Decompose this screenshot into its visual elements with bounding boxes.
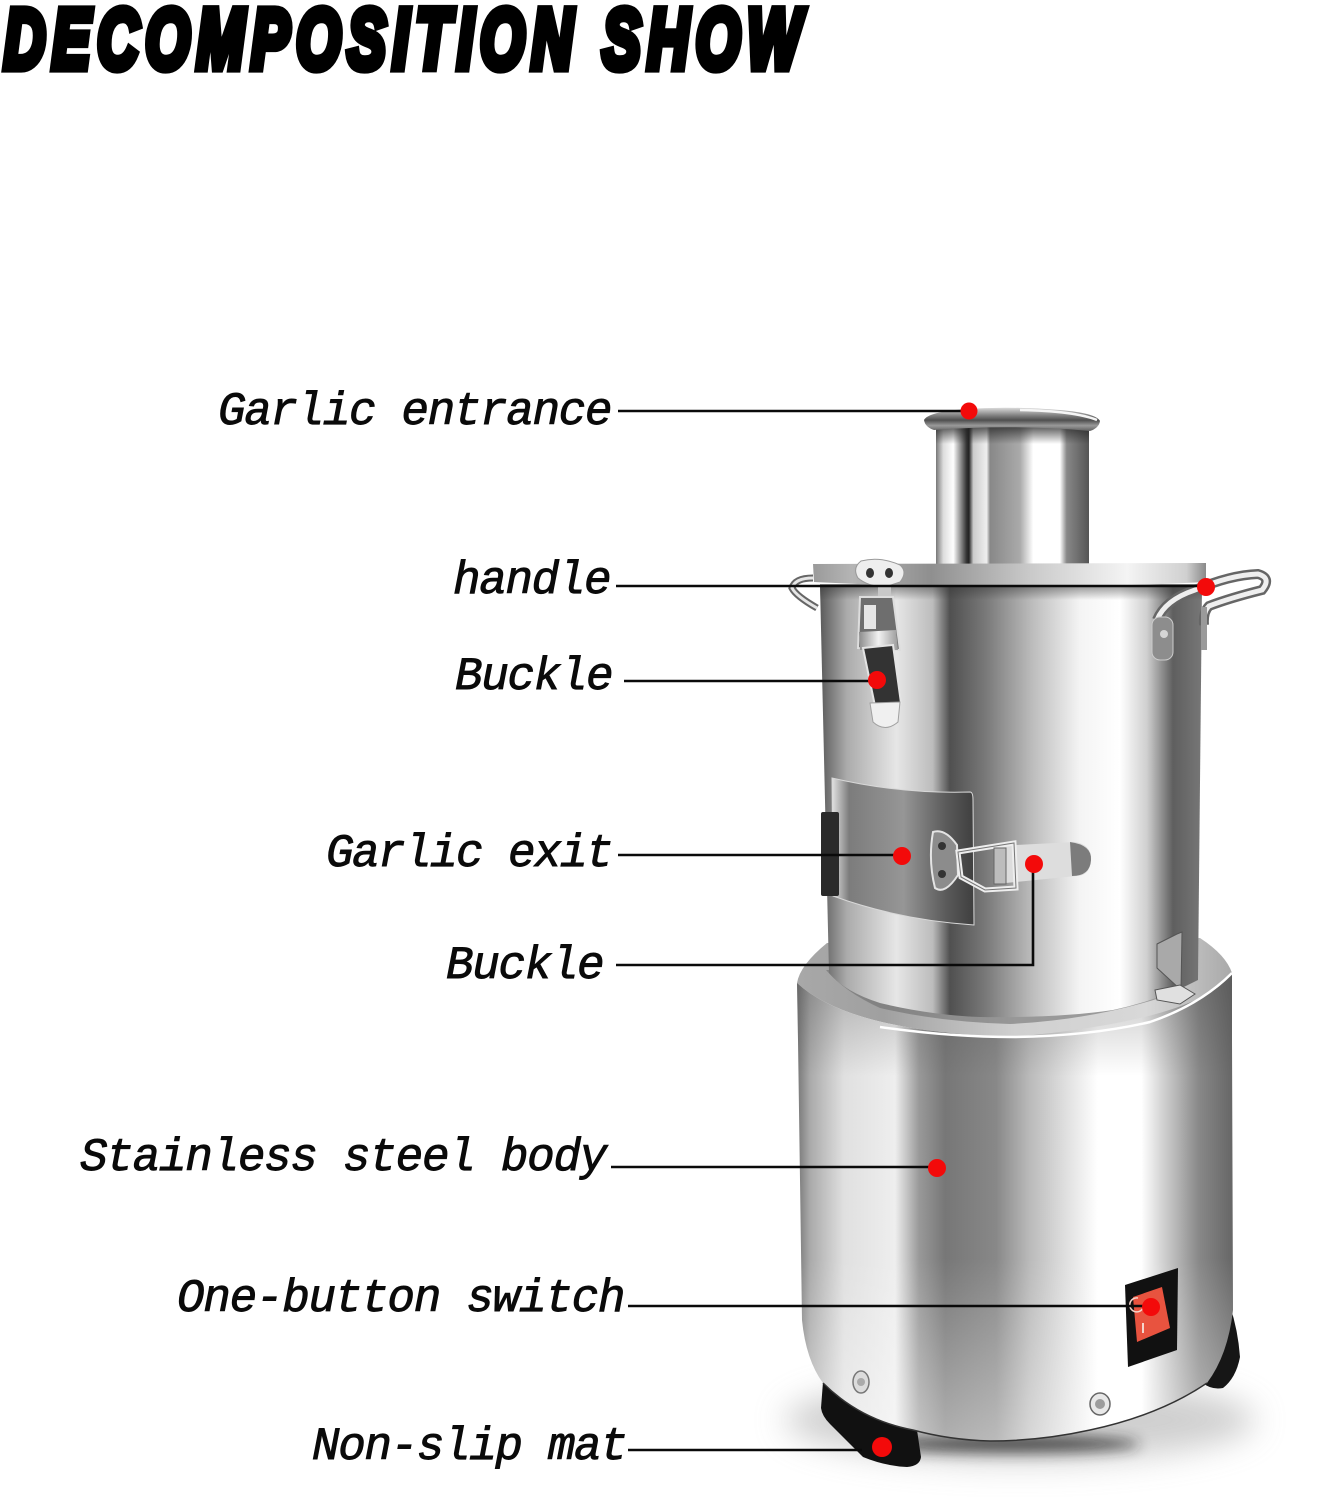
left front foot (821, 1382, 921, 1467)
callout: side buckle (446, 855, 1043, 992)
callout: garlic exit (326, 828, 911, 880)
callout: non-slip mat: Non-slip mat (312, 1421, 626, 1473)
upper body cylinder (820, 584, 1202, 1024)
callout: handle (453, 555, 1215, 607)
screw left (853, 1371, 869, 1393)
exit door panel (832, 778, 974, 925)
callout: garlic entrance: Garlic entrance (218, 386, 611, 438)
right handle (1152, 574, 1266, 660)
machine: garlic peeler (785, 408, 1266, 1467)
callout: stainless steel body (80, 1132, 946, 1184)
side latch (931, 831, 1091, 890)
callout: garlic entrance (218, 386, 978, 438)
feed tube (924, 408, 1100, 566)
base cylinder (797, 938, 1233, 1441)
top latch (856, 559, 904, 728)
lid (813, 563, 1206, 587)
left handle (792, 578, 817, 608)
callout: top buckle: Buckle (455, 651, 612, 703)
callout: one-button switch (177, 1273, 1160, 1325)
screw right (1090, 1393, 1110, 1415)
callout: stainless steel body: Stainless steel body (80, 1132, 609, 1184)
lower right clip (1155, 932, 1195, 1004)
power switch (1125, 1268, 1178, 1367)
callout: top buckle (455, 651, 886, 703)
callout: handle: handle (453, 555, 610, 607)
callout: garlic exit: Garlic exit (326, 828, 612, 880)
floor shadow (785, 1378, 1255, 1462)
callout: one-button switch: One-button switch (177, 1273, 624, 1325)
exit door hinge (821, 812, 839, 896)
right rear foot (1203, 1306, 1240, 1388)
callout: non-slip mat (312, 1421, 892, 1473)
callout: side buckle: Buckle (446, 940, 603, 992)
